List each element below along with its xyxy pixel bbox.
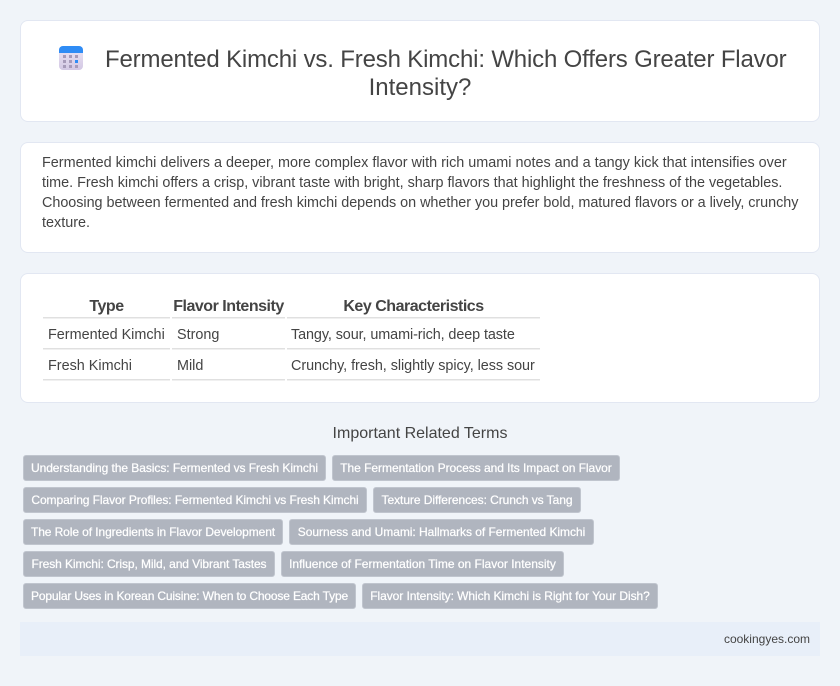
comparison table: Tangy, sour, umami-rich, deep taste [291,327,515,343]
icon: calendar [59,46,83,70]
intro paragraph: texture. [42,215,90,231]
related term tags: Fresh Kimchi: Crisp, Mild, and Vibrant Tastes [32,557,266,571]
comparison table [43,298,540,381]
related term tags: Texture Differences: Crunch vs Tang [382,493,572,507]
heading: related terms: Important Related Terms [333,425,507,442]
intro paragraph: time. Fresh kimchi offers a crisp, vibrant taste with bright, sharp flavors that highlight the freshness of the vegetables. [42,175,782,191]
panel: header [20,20,820,122]
comparison table: Strong [177,327,219,343]
comparison table: Fermented Kimchi [48,327,165,343]
comparison table: Mild [177,358,203,374]
intro paragraph: Fermented kimchi delivers a deeper, more complex flavor with rich umami notes and a tangy kick that intensifies over [42,155,787,171]
intro paragraph [42,155,798,231]
title: Intensity? [369,74,471,101]
title: Fermented Kimchi vs. Fresh Kimchi: Which Offers Greater Flavor [105,46,787,73]
related term tags: Sourness and Umami: Hallmarks of Fermented Kimchi [298,525,585,539]
related term tags: Popular Uses in Korean Cuisine: When to Choose Each Type [31,589,348,603]
related term tags: The Role of Ingredients in Flavor Development [31,525,275,539]
comparison table: Crunchy, fresh, slightly spicy, less sour [291,358,535,374]
panel: comparison table [20,273,820,403]
related term tags: The Fermentation Process and Its Impact on Flavor [340,461,612,475]
related term tags [23,455,658,609]
related term tags: Influence of Fermentation Time on Flavor Intensity [289,557,556,571]
intro paragraph: Choosing between fermented and fresh kimchi depends on whether you prefer bold, matured flavors or a lively, crunchy [42,195,798,211]
footer [20,622,820,656]
footer: cookingyes.com [724,632,810,646]
comparison table: Flavor Intensity [173,298,284,315]
comparison table: Key Characteristics [343,298,484,315]
title [105,46,787,101]
panel: intro text [20,142,820,253]
related term tags: Flavor Intensity: Which Kimchi is Right for Your Dish? [370,589,650,603]
comparison table: Fresh Kimchi [48,358,132,374]
comparison table: Type [89,298,124,315]
related term tags: Understanding the Basics: Fermented vs Fresh Kimchi [31,461,318,475]
related term tags: Comparing Flavor Profiles: Fermented Kimchi vs Fresh Kimchi [31,493,359,507]
